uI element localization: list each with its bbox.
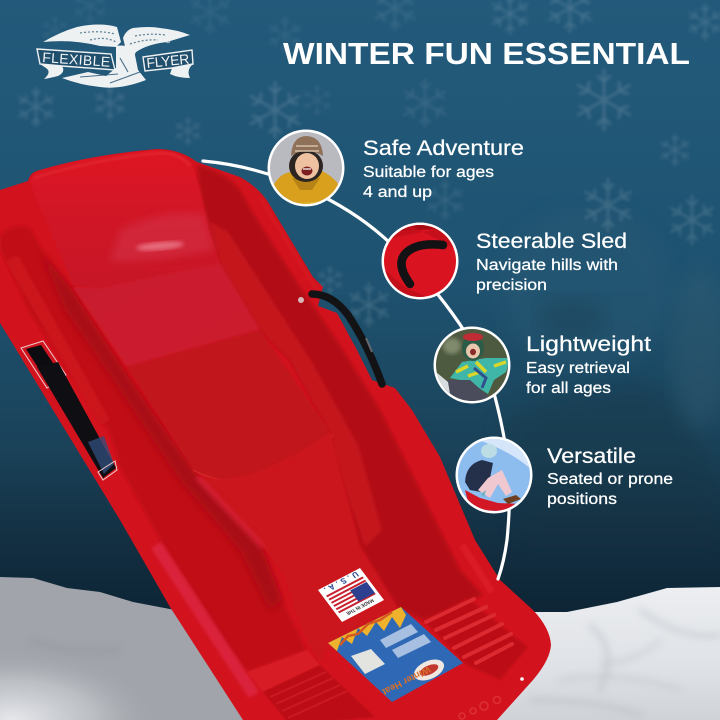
sled xyxy=(0,149,551,720)
sled: left foot ridges xyxy=(263,665,375,720)
photo: child sledding in snow xyxy=(456,436,532,515)
feature: Safe Adventure: Safe Adventure xyxy=(363,136,524,160)
left strap handle xyxy=(21,341,117,480)
feature: Steerable Sled xyxy=(476,229,627,294)
feature: Versatile: positions xyxy=(547,491,617,508)
logo: eagle body and crest xyxy=(62,46,146,88)
logo: Flexible Flyer: FLEXIBLE xyxy=(42,49,111,70)
feature: Lightweight: Easy retrieval xyxy=(526,360,630,377)
sled: right channel xyxy=(197,165,483,620)
feature: Steerable Sled: precision xyxy=(476,277,547,294)
feature: Safe Adventure xyxy=(363,136,524,201)
feature: Versatile: Versatile xyxy=(547,444,636,468)
logo: Flexible Flyer: FLYER xyxy=(146,51,190,71)
feature: Lightweight xyxy=(526,332,651,397)
sled: right foot well xyxy=(423,597,528,680)
logo: Flexible Flyer xyxy=(37,24,193,88)
sticker: USA flag xyxy=(317,567,384,622)
sled: lower seat xyxy=(127,330,333,482)
feature: Versatile xyxy=(547,444,673,508)
photo: child in colorful jacket xyxy=(434,326,510,405)
sled: upper seat xyxy=(73,263,260,367)
sticker: USA flag: U.S.A. xyxy=(322,570,360,594)
blurred background child xyxy=(500,210,720,540)
logo: right banner xyxy=(143,50,193,71)
sled: left channel xyxy=(0,226,306,672)
sled: right foot ridges xyxy=(426,599,512,663)
feature: Lightweight: for all ages xyxy=(526,380,611,397)
sticker: product label: Winter Heat xyxy=(379,663,432,697)
sled: right rim highlight xyxy=(260,198,318,292)
sled: embossed marks xyxy=(459,696,500,719)
photo: child in yellow jacket xyxy=(268,130,345,206)
feature: Safe Adventure: Suitable for ages xyxy=(363,164,494,181)
feature: Steerable Sled: Steerable Sled xyxy=(476,229,627,253)
logo: eagle wings xyxy=(43,24,121,47)
sticker: USA flag: MADE IN THE xyxy=(344,597,375,616)
sled: left rim highlight xyxy=(156,545,254,695)
snow ground xyxy=(0,577,720,720)
logo: left banner xyxy=(37,49,115,70)
sled: center foot panel xyxy=(200,435,396,606)
sled: head rest xyxy=(30,150,220,288)
photo: sled handle xyxy=(382,222,458,300)
snowflake pattern xyxy=(19,0,720,327)
feature: Safe Adventure: 4 and up xyxy=(363,184,432,201)
feature: Lightweight: Lightweight xyxy=(526,332,651,356)
sticker: product label xyxy=(328,607,463,702)
sled: lower left panel xyxy=(247,650,320,692)
feature: Versatile: Seated or prone xyxy=(547,471,673,488)
connector arc xyxy=(203,161,509,579)
feature: Steerable Sled: Navigate hills with xyxy=(476,257,618,274)
title: WINTER FUN ESSENTIAL xyxy=(283,37,690,71)
right steering handle xyxy=(298,294,382,384)
